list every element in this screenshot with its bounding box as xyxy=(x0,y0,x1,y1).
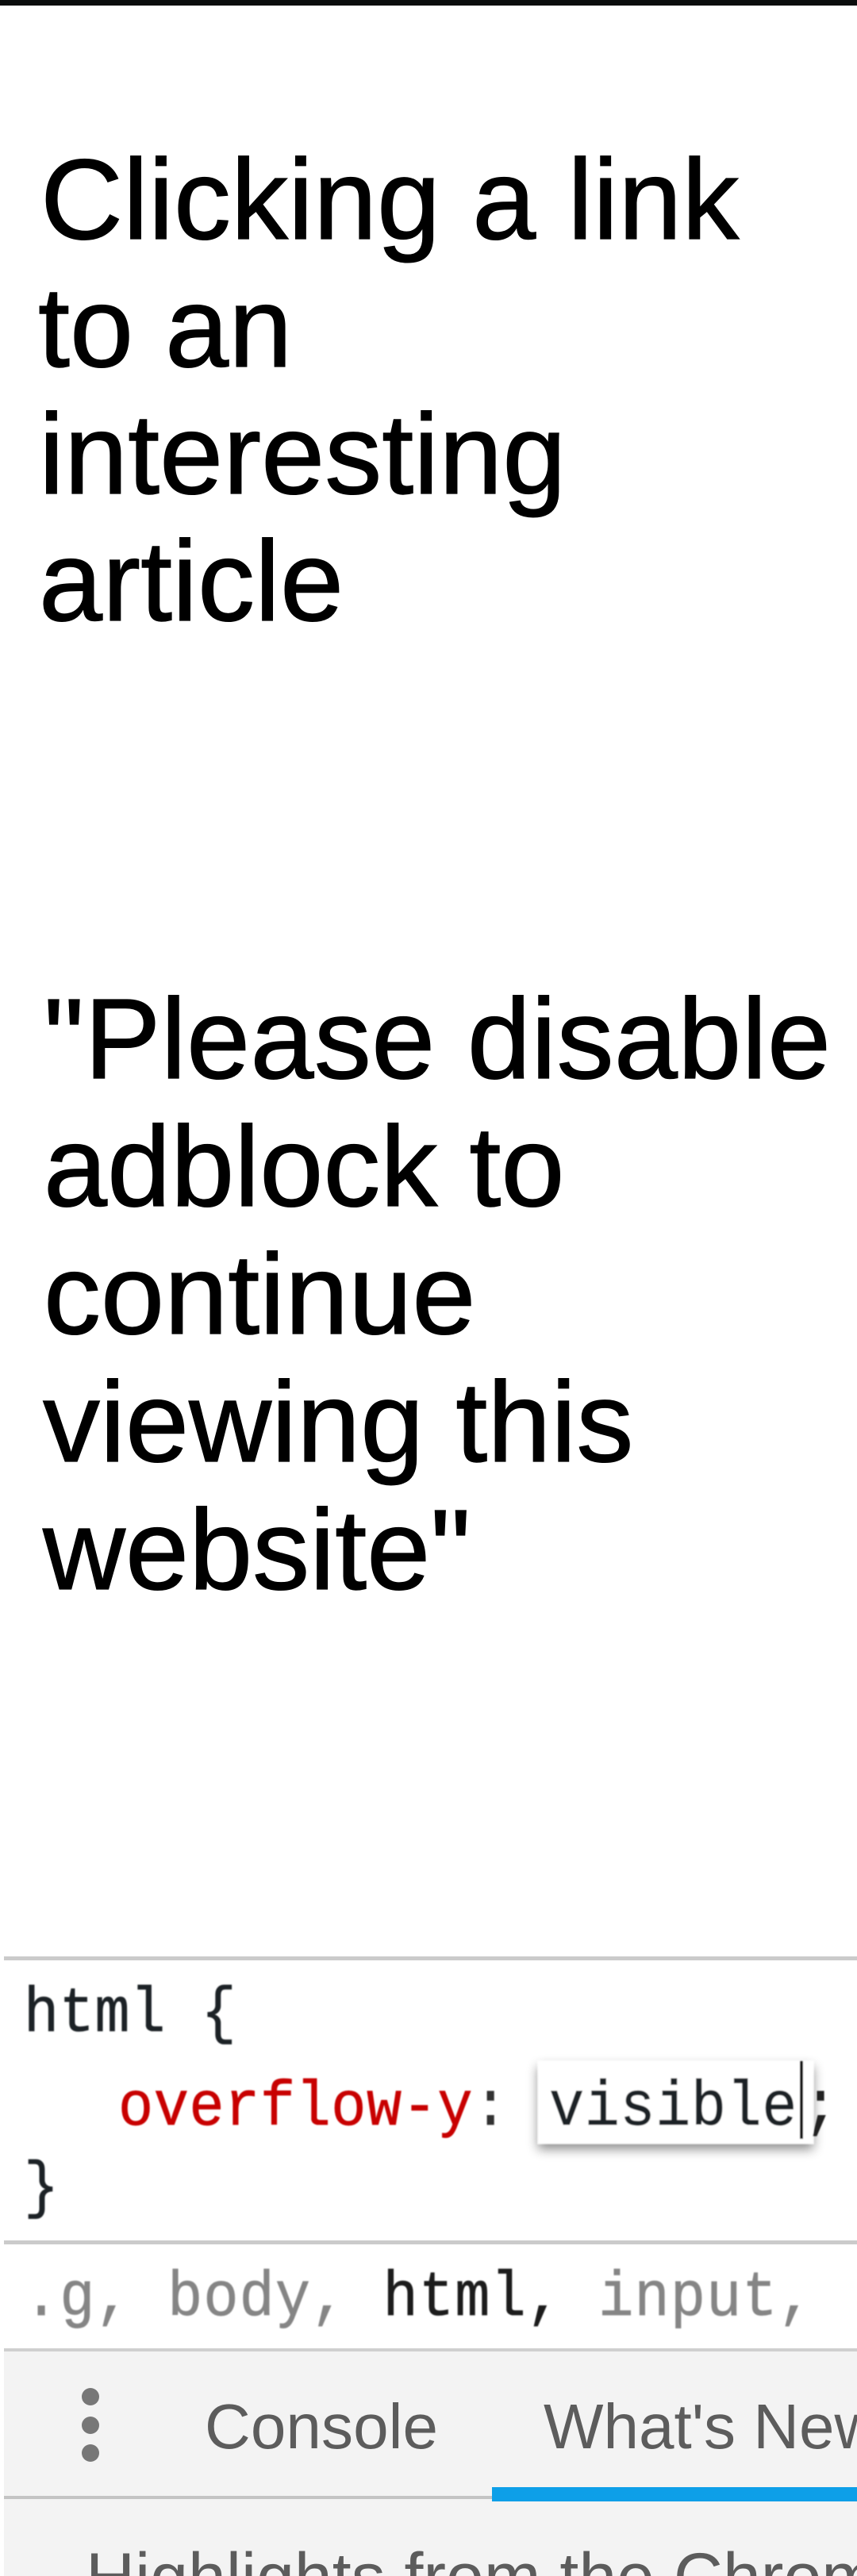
text block: clicking a link xyxy=(38,136,740,645)
css rule code: overflow-y: xyxy=(118,2072,509,2144)
text block: clicking a link: interesting xyxy=(39,390,566,518)
value edit box: visible xyxy=(549,2072,797,2144)
text block: adblock message: adblock to xyxy=(44,1103,564,1230)
text block: adblock message: website" xyxy=(42,1486,471,1614)
tab bar background xyxy=(4,2348,857,2576)
active tab underline xyxy=(492,2487,857,2501)
text block: adblock message xyxy=(42,975,831,1614)
icon: kebab menu xyxy=(82,2388,99,2462)
text block: clicking a link: to an xyxy=(38,263,292,391)
text block: adblock message: viewing this xyxy=(43,1358,633,1486)
text block: clicking a link: Clicking a link xyxy=(40,136,740,263)
css rule code: html { xyxy=(24,1979,236,2051)
css rule code: } xyxy=(24,2153,60,2225)
text block: adblock message: "Please disable xyxy=(44,975,831,1103)
devtools screenshot panel xyxy=(4,1956,857,2576)
top black bar xyxy=(0,0,857,6)
text block: clicking a link: article xyxy=(39,517,344,645)
css rule code xyxy=(24,1979,839,2225)
css rule code: ; xyxy=(803,2072,839,2144)
text block: adblock message: continue xyxy=(44,1230,475,1358)
tab: console: Console xyxy=(205,2391,438,2462)
selector list: .g, body, html, input, xyxy=(24,2263,814,2335)
